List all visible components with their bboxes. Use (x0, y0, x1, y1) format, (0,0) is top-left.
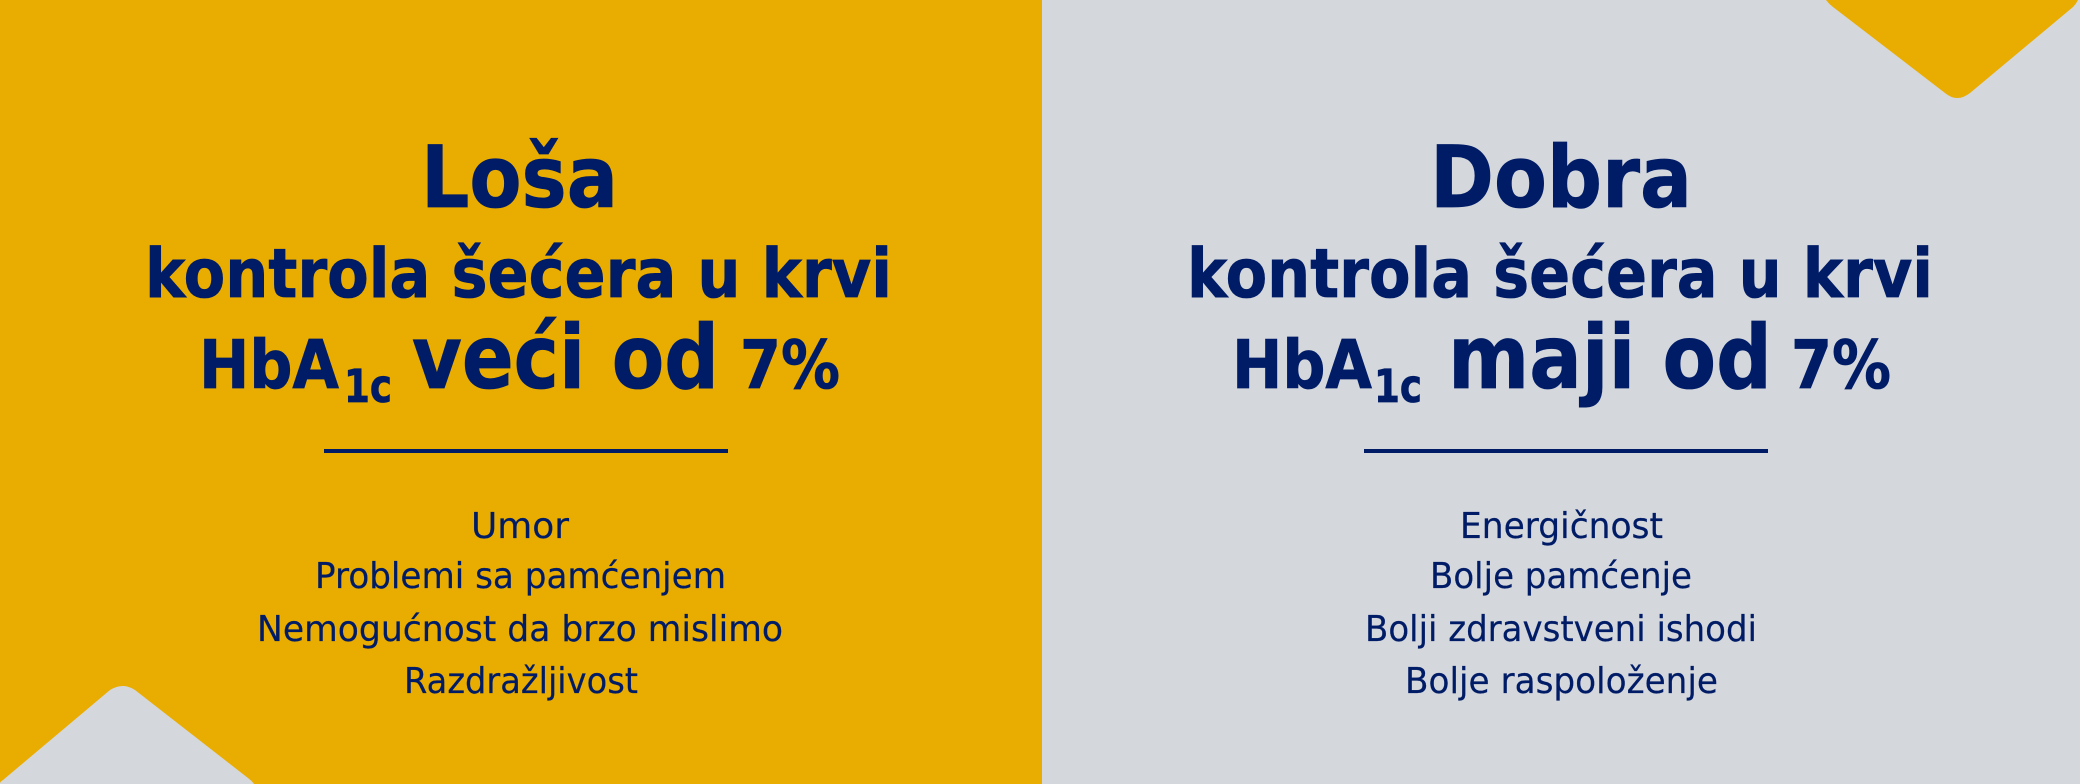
threshold line: HbA1c above 7% (199, 306, 840, 413)
heading: Dobra: Dobra (1430, 128, 1692, 228)
threshold line: HbA1c above 7%: 1c (344, 360, 392, 413)
threshold line: HbA1c below 7%: maji od (1448, 306, 1772, 409)
panel: poor control (0, 0, 1042, 784)
threshold line: HbA1c below 7% (1232, 306, 1891, 413)
benefit list (1365, 506, 1757, 702)
symptom list: Razdražljivost (404, 661, 638, 702)
symptom list (257, 506, 783, 702)
benefit list: Bolji zdravstveni ishodi (1365, 609, 1757, 650)
corner shape: bottom left (0, 686, 254, 784)
divider (1364, 449, 1768, 453)
heading: Loša: Loša (421, 128, 618, 228)
threshold line: HbA1c above 7%: veći od (412, 306, 719, 409)
benefit list: Bolje pamćenje (1430, 556, 1692, 597)
threshold line: HbA1c above 7%: 7% (740, 326, 840, 404)
symptom list: Umor (471, 506, 569, 547)
threshold line: HbA1c below 7%: 7% (1791, 326, 1891, 404)
threshold line: HbA1c below 7%: HbA (1232, 326, 1372, 404)
corner shape: top right (1826, 0, 2078, 98)
benefit list: Energičnost (1460, 506, 1663, 547)
subheading: blood sugar control: kontrola šećera u krvi (145, 235, 892, 314)
threshold line: HbA1c above 7%: HbA (199, 326, 339, 404)
benefit list: Bolje raspoloženje (1405, 661, 1718, 702)
threshold line: HbA1c below 7%: 1c (1374, 360, 1422, 413)
symptom list: Nemogućnost da brzo mislimo (257, 609, 783, 650)
subheading: blood sugar control: kontrola šećera u krvi (1187, 235, 1933, 314)
symptom list: Problemi sa pamćenjem (315, 556, 726, 597)
divider (324, 449, 728, 453)
panel: good control (1042, 0, 2080, 784)
